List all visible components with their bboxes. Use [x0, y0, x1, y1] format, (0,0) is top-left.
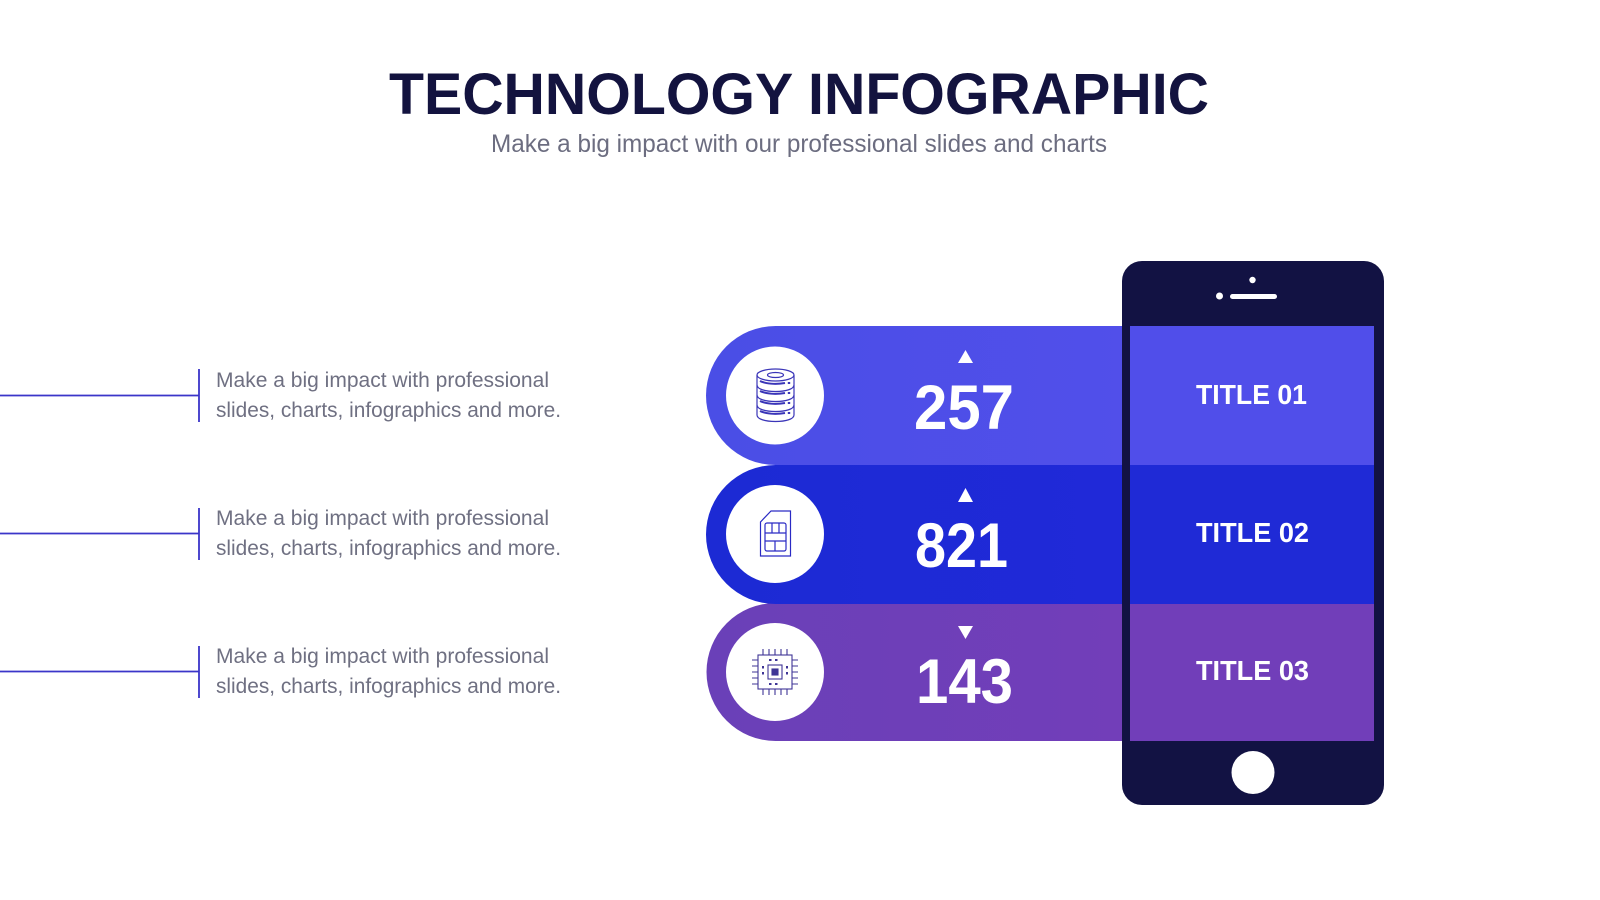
- panel: pill 2: [706, 465, 1130, 604]
- trend arrow up: [958, 350, 973, 363]
- text block 1 with connector: Make a big impact with professional: [216, 369, 549, 392]
- icon: sim card: [760, 511, 790, 556]
- text block 3 with connector: slides, charts, infographics and more.: [216, 675, 561, 698]
- trend arrow up: [958, 488, 973, 502]
- subtitle: Make a big impact with our professional slides and charts: [491, 130, 1107, 158]
- title: TECHNOLOGY INFOGRAPHIC: [389, 62, 1209, 127]
- text block 2 with connector: Make a big impact with professional: [216, 507, 549, 530]
- text block 1 with connector: slides, charts, infographics and more.: [216, 399, 561, 422]
- panel: pill 1: [706, 326, 1130, 465]
- screen band 2: TITLE 02: [1196, 517, 1309, 548]
- phone: [1122, 261, 1384, 805]
- icon: database: [757, 369, 794, 422]
- screen band 3: [1130, 604, 1374, 741]
- screen band 1: TITLE 01: [1196, 379, 1307, 410]
- panel: pill 3: [707, 603, 1130, 741]
- home button: [1232, 751, 1274, 794]
- screen band 2: [1130, 465, 1374, 604]
- value 143: 143: [916, 647, 1013, 717]
- speaker and camera: [1216, 277, 1277, 300]
- text block 2 with connector: slides, charts, infographics and more.: [216, 537, 561, 560]
- text block 2 with connector: [0, 507, 561, 560]
- text block 3 with connector: Make a big impact with professional: [216, 645, 549, 668]
- value 821: 821: [915, 511, 1008, 581]
- screen band 1: [1130, 326, 1374, 465]
- trend arrow down: [958, 626, 973, 639]
- value 257: 257: [914, 373, 1014, 443]
- text block 3 with connector: [0, 645, 561, 698]
- icon: chip: [752, 649, 798, 695]
- screen band 3: TITLE 03: [1196, 655, 1309, 686]
- text block 1 with connector: [0, 369, 561, 422]
